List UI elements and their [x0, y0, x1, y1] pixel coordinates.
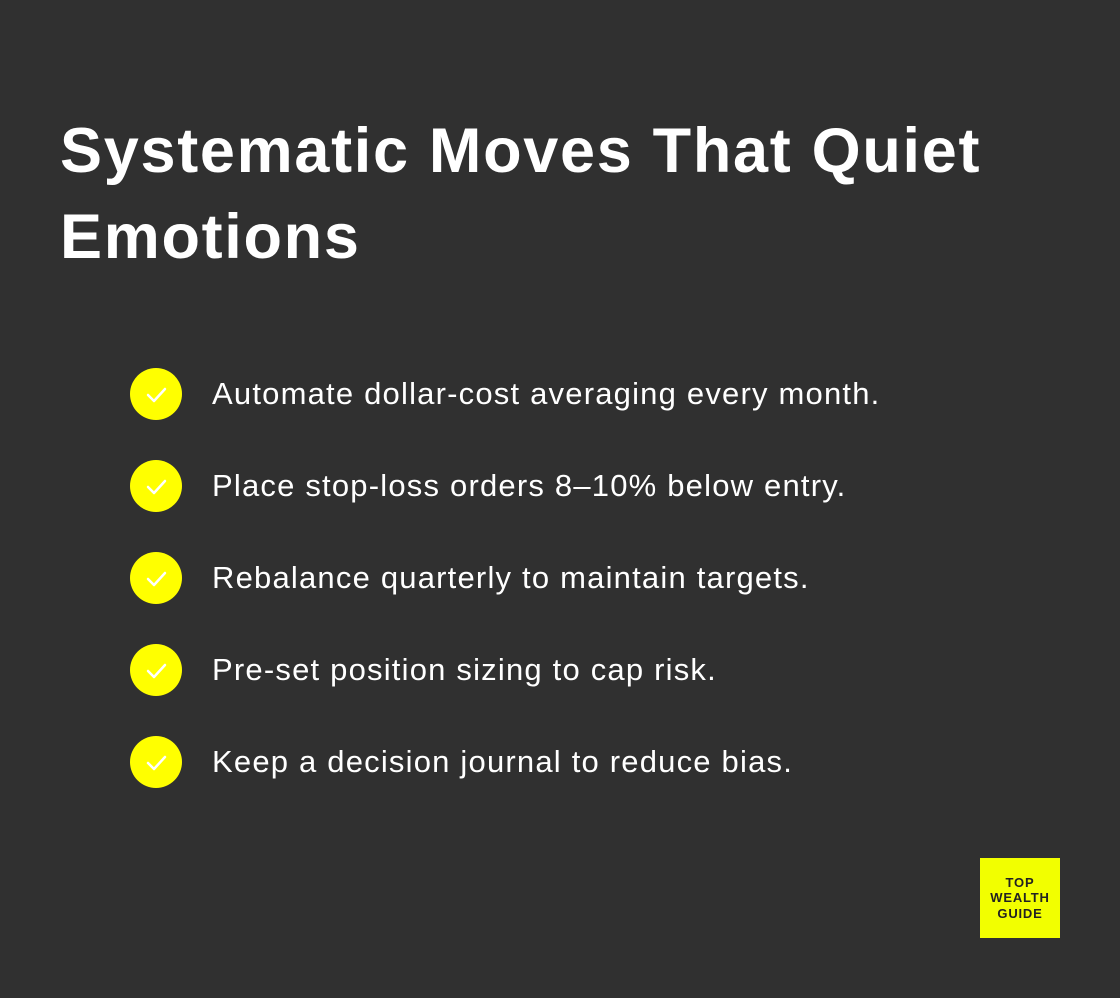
- text: Place stop-loss orders 8–10% below entry.: [212, 468, 846, 503]
- text: Keep a decision journal to reduce bias.: [212, 744, 793, 779]
- icon: check: [130, 644, 182, 696]
- text: Automate dollar-cost averaging every month.: [212, 376, 880, 411]
- item 5: [130, 736, 793, 788]
- item 1: [130, 368, 880, 420]
- text: Rebalance quarterly to maintain targets.: [212, 560, 810, 595]
- icon: check: [130, 552, 182, 604]
- logo: [980, 858, 1060, 938]
- text: Pre-set position sizing to cap risk.: [212, 652, 717, 687]
- item 2: [130, 460, 846, 512]
- item 4: [130, 644, 717, 696]
- logo: WEALTH: [990, 890, 1050, 905]
- icon: check: [130, 368, 182, 420]
- icon: check: [130, 460, 182, 512]
- title: [60, 116, 981, 272]
- logo: TOP: [1006, 875, 1034, 890]
- item 3: [130, 552, 810, 604]
- logo: GUIDE: [997, 906, 1043, 921]
- checklist: [130, 368, 880, 788]
- title: Emotions: [60, 202, 361, 272]
- icon: check: [130, 736, 182, 788]
- title: Systematic Moves That Quiet: [60, 116, 981, 186]
